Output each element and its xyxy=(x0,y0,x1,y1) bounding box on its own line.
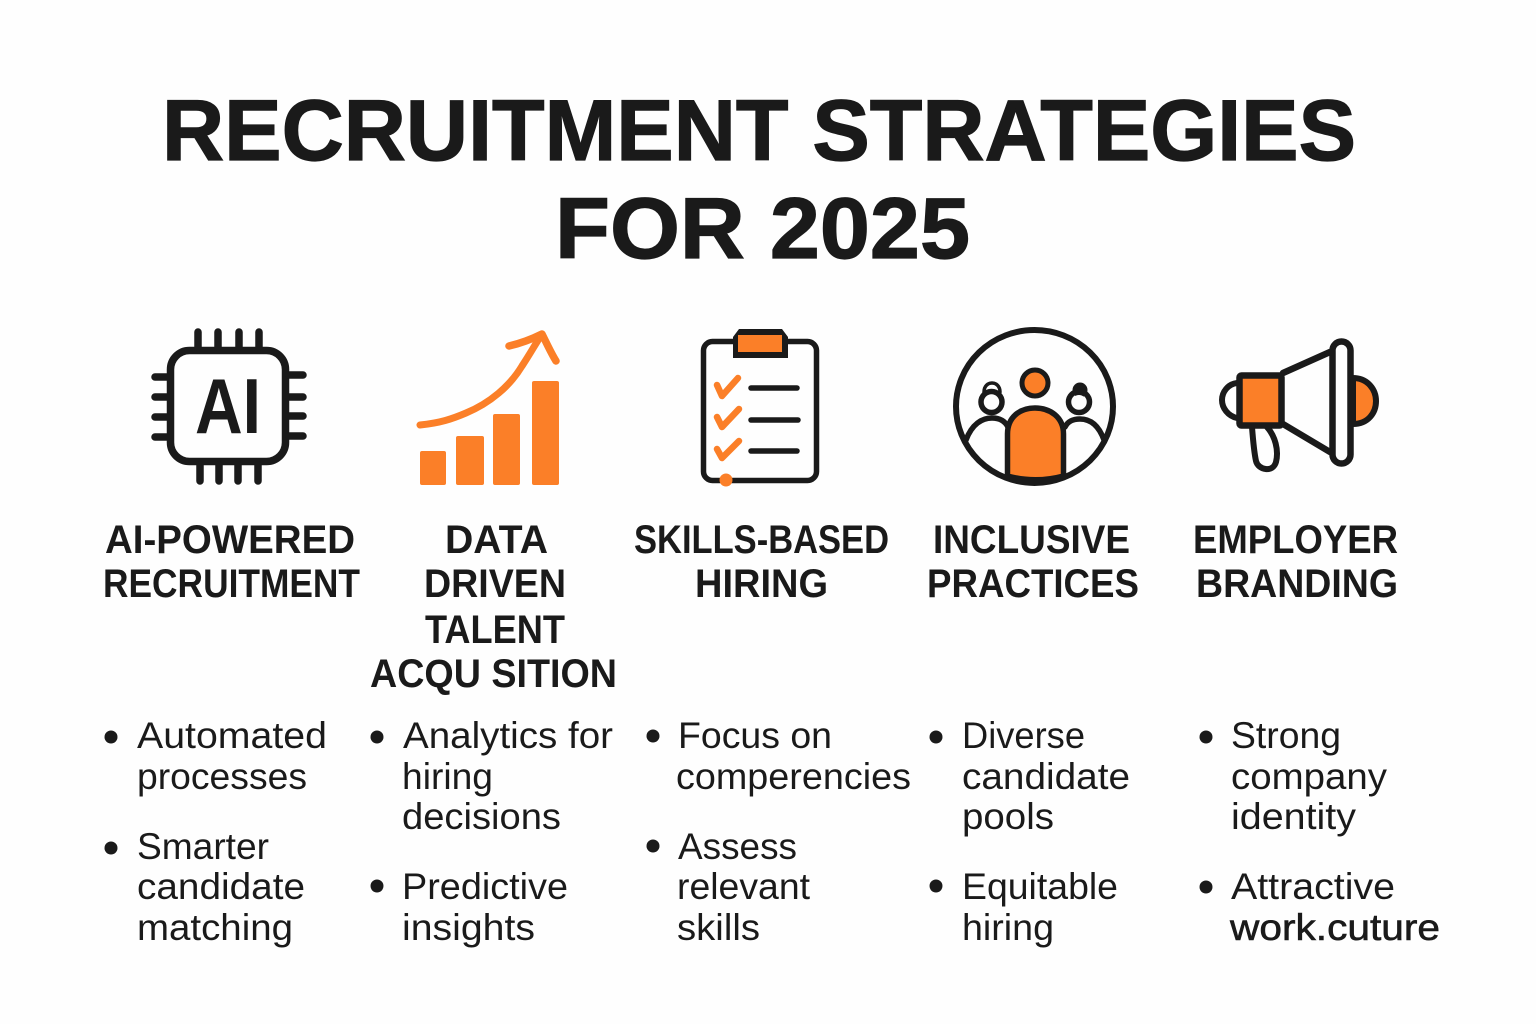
heading: inclusive practices: PRACTICES xyxy=(927,562,1139,606)
bullet list: AI-powered recruitment: Smarter xyxy=(137,826,269,867)
bullet list: skills-based hiring: Assess xyxy=(678,826,797,867)
heading: data driven talent acquisition xyxy=(370,518,617,696)
title: RECRUITMENT STRATEGIES xyxy=(162,83,1356,179)
bullet list: employer branding xyxy=(1200,715,1440,948)
heading: inclusive practices xyxy=(927,518,1139,606)
heading: AI-powered recruitment: RECRUITMENT xyxy=(103,562,360,606)
heading: data driven talent acquisition: DRIVEN xyxy=(424,562,566,606)
icon: AI chip: AI xyxy=(195,362,261,450)
panel: inclusive practices xyxy=(927,330,1139,948)
bullet list: data driven talent acquisition: insights xyxy=(402,907,535,948)
heading: skills-based hiring: SKILLS-BASED xyxy=(634,518,889,562)
bullet list: data driven talent acquisition xyxy=(370,715,613,948)
bullet list: data driven talent acquisition: Analytics for xyxy=(403,715,613,756)
heading: skills-based hiring xyxy=(634,518,889,606)
icon: clipboard checklist xyxy=(704,329,816,486)
bullet list: inclusive practices: Equitable xyxy=(962,866,1118,907)
bullet list: data driven talent acquisition: Predictive xyxy=(402,866,568,907)
icon: bar chart with rising arrow xyxy=(420,334,559,485)
panel: AI-powered recruitment xyxy=(103,332,360,948)
panel: skills-based hiring xyxy=(634,329,911,948)
title xyxy=(162,83,1356,277)
icon: megaphone xyxy=(1222,342,1376,469)
bullet list: employer branding: identity xyxy=(1231,796,1357,837)
heading: data driven talent acquisition: DATA xyxy=(445,518,548,562)
bullet list: employer branding: work.cuture xyxy=(1229,907,1440,948)
bullet list: AI-powered recruitment: matching xyxy=(137,907,293,948)
bullet list: data driven talent acquisition: decisions xyxy=(402,796,561,837)
heading: data driven talent acquisition: ACQU SITION xyxy=(370,652,617,696)
bullet list: inclusive practices xyxy=(930,715,1130,948)
heading: AI-powered recruitment: AI-POWERED xyxy=(105,518,355,562)
heading: data driven talent acquisition: TALENT xyxy=(425,608,565,652)
bullet list: inclusive practices: hiring xyxy=(962,907,1054,948)
bullet list: AI-powered recruitment xyxy=(104,715,327,948)
title: FOR 2025 xyxy=(555,181,970,277)
heading: employer branding: BRANDING xyxy=(1196,562,1398,606)
bullet list: employer branding: company xyxy=(1231,756,1388,797)
bullet list: skills-based hiring: relevant xyxy=(677,866,811,907)
bullet list: inclusive practices: Diverse xyxy=(962,715,1085,756)
bullet list: AI-powered recruitment: candidate xyxy=(137,866,305,907)
bullet list: AI-powered recruitment: processes xyxy=(137,756,307,797)
bullet list: employer branding: Strong xyxy=(1231,715,1341,756)
bullet list: data driven talent acquisition: hiring xyxy=(402,756,493,797)
icon: AI chip xyxy=(155,332,303,481)
bullet list: skills-based hiring: skills xyxy=(677,907,760,948)
heading: inclusive practices: INCLUSIVE xyxy=(933,518,1130,562)
bullet list: skills-based hiring xyxy=(646,715,911,948)
icon: group of people in circle xyxy=(956,330,1113,483)
heading: employer branding: EMPLOYER xyxy=(1193,518,1398,562)
bullet list: skills-based hiring: Focus on xyxy=(678,715,832,756)
panel: employer branding xyxy=(1193,342,1440,948)
bullet list: employer branding: Attractive xyxy=(1231,866,1395,907)
heading: skills-based hiring: HIRING xyxy=(695,562,828,606)
bullet list: inclusive practices: pools xyxy=(962,796,1054,837)
bullet list: AI-powered recruitment: Automated xyxy=(137,715,327,756)
heading: AI-powered recruitment xyxy=(103,518,360,606)
panel: data driven talent acquisition xyxy=(370,334,617,948)
bullet list: skills-based hiring: comperencies xyxy=(676,756,911,797)
bullet list: inclusive practices: candidate xyxy=(962,756,1130,797)
heading: employer branding xyxy=(1193,518,1398,606)
